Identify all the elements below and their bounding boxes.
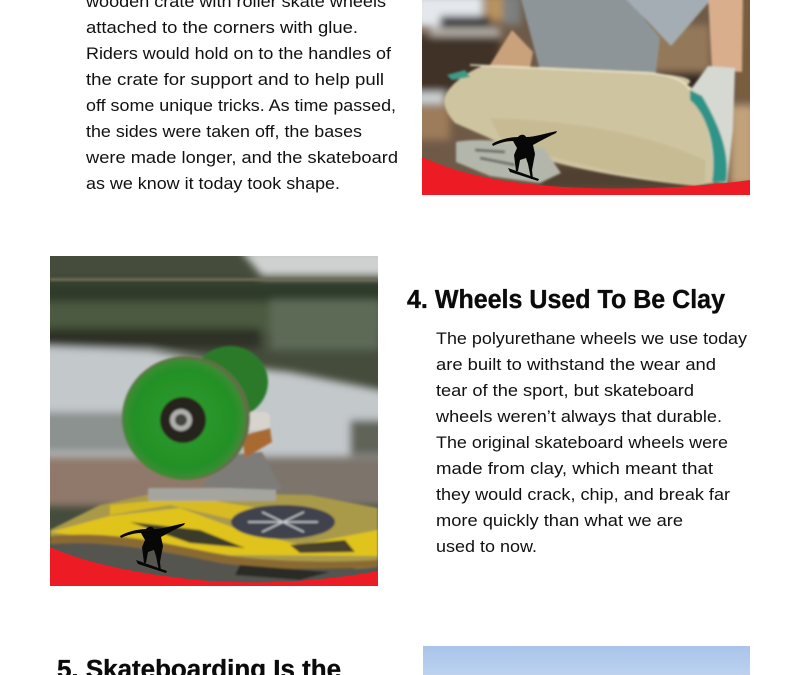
text block: section 4 body: used to now. <box>436 537 537 556</box>
text block: section 3 body: the crate for support and to help pull <box>86 70 384 89</box>
heading: section 4: 4. Wheels Used To Be Clay <box>407 286 726 314</box>
text block: section 3 body: the sides were taken off, the bases <box>86 122 362 141</box>
text block: section 4 body: The polyurethane wheels we use today <box>436 329 748 348</box>
icon: skater silhouette <box>492 131 557 181</box>
icon: skater silhouette <box>120 523 185 573</box>
text block: section 3 body: attached to the corners with glue. <box>86 18 358 37</box>
text block: section 4 body: more quickly than what we are <box>436 511 683 530</box>
red curved corner band <box>422 157 750 195</box>
text block: section 4 body: made from clay, which meant that <box>436 459 713 478</box>
text block: section 4 body: The original skateboard wheels were <box>436 433 728 452</box>
red curved corner band <box>50 547 378 586</box>
text block: section 4 body: are built to withstand the wear and <box>436 355 716 374</box>
text block: section 3 body <box>85 0 398 193</box>
photo: shaping a skateboard deck <box>415 0 755 195</box>
text block: section 4 body <box>435 329 748 556</box>
text block: section 3 body: Riders would hold on to the handles of <box>86 44 391 63</box>
text block: section 4 body: they would crack, chip, and break far <box>436 485 730 504</box>
text block: section 4 body: wheels weren’t always that durable. <box>435 407 722 426</box>
text block: section 4 body: tear of the sport, but skateboard <box>436 381 694 400</box>
photo: section 5 sky <box>423 646 750 675</box>
text block: section 3 body: as we know it today took shape. <box>86 174 340 193</box>
photo: green wheels on a skateboard <box>40 250 390 586</box>
text block: section 3 body: off some unique tricks. As time passed, <box>86 96 396 115</box>
text block: section 3 body: were made longer, and the skateboard <box>85 148 398 167</box>
